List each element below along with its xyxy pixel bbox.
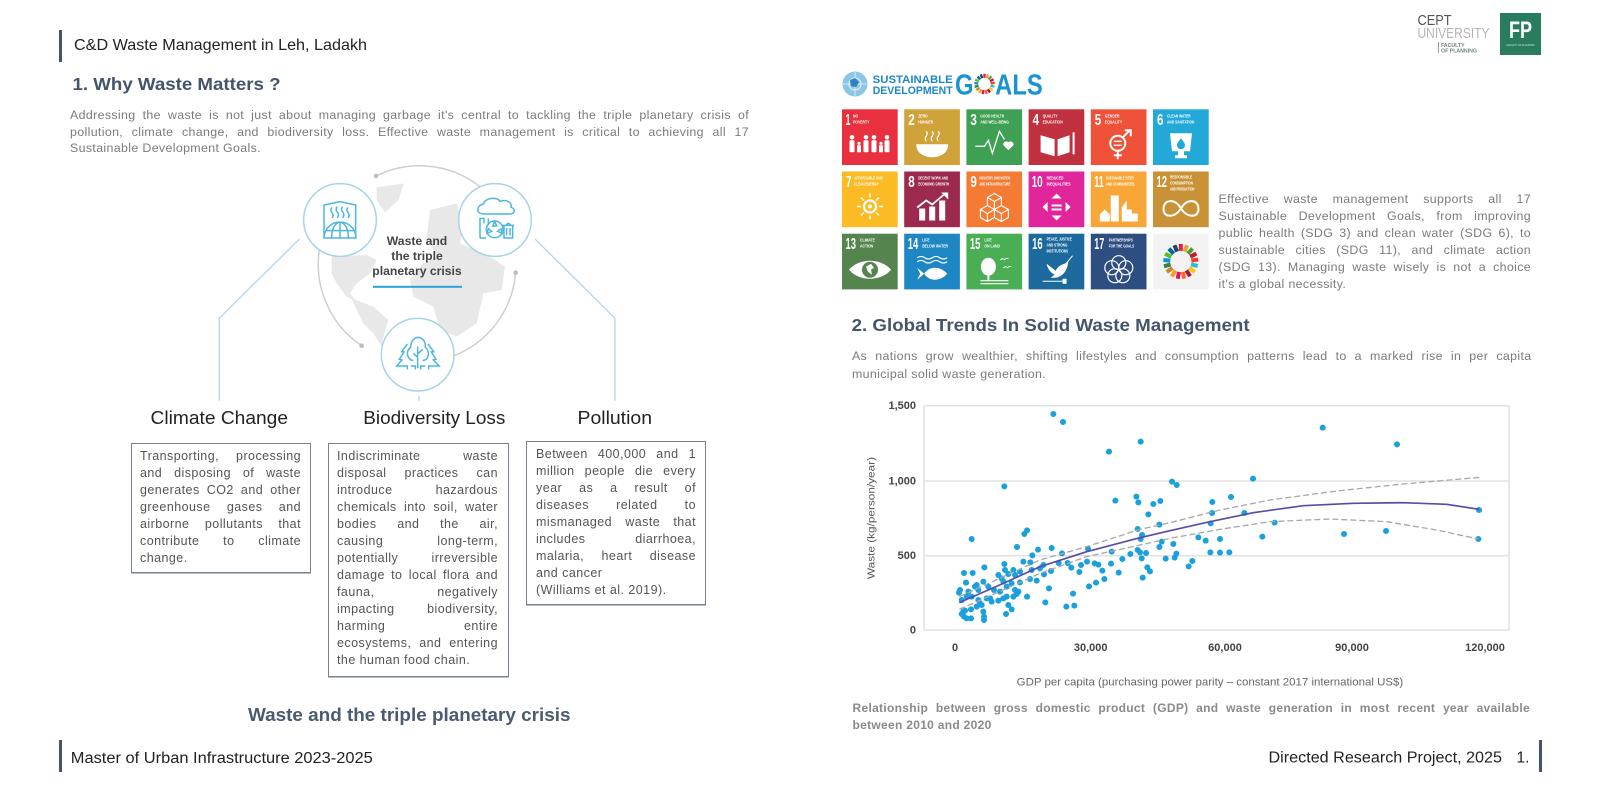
tile: SDG 7: 7 <box>846 174 852 191</box>
SDG tiles grid <box>842 109 1209 289</box>
tile: SDG 5 <box>1091 109 1146 165</box>
tile: SDG 2: 2 <box>908 112 915 129</box>
intro paragraph: why waste matters: Sustainable Development Goals. <box>70 141 261 155</box>
text box: climate change: Transporting, processing <box>140 449 301 463</box>
y axis tick labels: 500 <box>898 550 916 562</box>
diagram: waste and the triple planetary crisis <box>219 166 615 401</box>
tile: SDG 1: 1 <box>846 112 851 129</box>
text box: pollution: million people die every <box>536 464 696 478</box>
text box: biodiversity loss: bodies and the air, <box>337 517 498 531</box>
cycle arrow heads <box>359 174 518 348</box>
icon: greenhouse effect <box>304 184 376 256</box>
tile: SDG 12: RESPONSIBLE <box>1170 175 1193 180</box>
grey cycle arrows <box>318 166 516 356</box>
label: climate change: Climate Change <box>150 408 288 428</box>
tile: SDG 1: NO <box>853 113 858 118</box>
tile: SDG 4 <box>1029 109 1084 165</box>
tile: SDG 8 <box>904 172 960 227</box>
trend line <box>959 503 1479 603</box>
tile: SDG 11 <box>1091 172 1146 227</box>
x axis tick labels: 120,000 <box>1465 642 1505 654</box>
tile: SDG 8: DECENT WORK AND <box>918 176 948 181</box>
tile: SDG 17: PARTNERSHIPS <box>1109 238 1133 243</box>
tile: SDG 17 <box>1091 234 1146 289</box>
tile: SDG 11: SUSTAINABLE CITIES <box>1106 176 1134 181</box>
diagram centre title: Waste and <box>387 234 447 248</box>
tile: SDG 7: AFFORDABLE AND <box>854 176 883 181</box>
SDG description paragraph: sustainable cities (SDG 11), and climate action <box>1218 242 1531 256</box>
tile: SDG 16 <box>1029 234 1084 289</box>
SDG description paragraph: Sustainable Development Goals, from improving <box>1218 208 1531 222</box>
CEPT University logo: FACULTY <box>1441 43 1465 49</box>
global trends paragraph: municipal solid waste generation. <box>852 366 1046 380</box>
x axis title: GDP per capita (purchasing power parity – constant 2017 international US$) <box>1017 676 1403 688</box>
tile: SDG 2: HUNGER <box>918 119 933 124</box>
tile: SDG 16: INSTITUTIONS <box>1047 249 1068 254</box>
icon: UN emblem <box>842 72 868 96</box>
connector lines <box>219 239 615 401</box>
tile: SDG 9 <box>966 172 1022 227</box>
CEPT University logo: CEPT <box>1418 12 1452 29</box>
global trends paragraph: As nations grow wealthier, shifting lifestyles and consumption patterns lead to a marked rise in per capita <box>852 349 1532 363</box>
heading: why waste matters: 1. Why Waste Matters ? <box>72 74 280 94</box>
tile: SDG 13: CLIMATE <box>860 237 875 243</box>
intro paragraph: why waste matters: pollution, climate change, and biodiversity loss. Effective waste management is critical to achieving all 17 <box>70 125 749 139</box>
icon: biodiversity trees <box>381 318 454 391</box>
tile: SDG 2 <box>904 109 960 165</box>
globe land masses <box>332 183 505 347</box>
text box: pollution: Between 400,000 and 1 <box>536 447 696 461</box>
tile: SDG 9: 9 <box>970 174 977 191</box>
tile: SDG 14 <box>904 234 960 289</box>
text box: biodiversity loss: fauna, negatively <box>337 585 498 599</box>
tile: SDG 2: ZERO <box>918 113 928 118</box>
global trends paragraph <box>852 349 1532 380</box>
tile: SDG 3 <box>966 109 1022 165</box>
label: pollution: Pollution <box>578 408 652 428</box>
tile: SDG 14: 14 <box>908 236 918 253</box>
text box: pollution <box>526 441 706 605</box>
tile: SDG 13: 13 <box>846 236 856 253</box>
diagram title underline <box>373 286 462 288</box>
x axis tick labels: 30,000 <box>1074 642 1108 654</box>
diagram centre title: planetary crisis <box>372 264 462 278</box>
tile: SDG 9: INDUSTRY, INNOVATION <box>979 176 1011 181</box>
Faculty of Planning logo: FACULTY OF PLANNING <box>1506 43 1535 47</box>
tile: SDG 1 <box>842 109 898 165</box>
tile: SDG 17: 17 <box>1094 236 1104 253</box>
tile: SDG 10 <box>1029 172 1084 227</box>
y axis tick labels <box>888 400 916 636</box>
tile: SDG 15: 15 <box>970 236 980 253</box>
tile: SDG 7 <box>842 172 898 227</box>
SDG description paragraph: (SDG 13). Managing waste wisely is not a choice <box>1218 260 1531 274</box>
text box: pollution: malaria, heart disease <box>536 549 696 563</box>
tile: SDG 12: 12 <box>1156 174 1167 191</box>
y axis tick labels: 1,000 <box>888 476 916 488</box>
tile: SDG 12: CONSUMPTION <box>1170 181 1193 186</box>
tile: SDG 12 <box>1153 172 1209 227</box>
data points <box>959 414 1479 620</box>
footer project text: Directed Research Project, 2025 <box>1268 750 1502 766</box>
tile: SDG 6: AND SANITATION <box>1167 120 1195 124</box>
tile: SDG 3: GOOD HEALTH <box>980 114 1004 118</box>
y axis title: Waste (kg/person/year) <box>866 457 878 579</box>
diagram caption: Waste and the triple planetary crisis <box>248 705 570 725</box>
y axis tick labels: 0 <box>910 624 916 636</box>
text box: biodiversity loss: Indiscriminate waste <box>337 449 498 463</box>
tile: SDG 16: PEACE, JUSTICE <box>1047 237 1072 242</box>
SDG description paragraph: public health (SDG 3) and clean water (SDG 6), to <box>1218 226 1531 240</box>
icon: pollution <box>459 184 531 256</box>
SDG description paragraph: Effective waste management supports all 17 <box>1218 192 1531 206</box>
SDG logo <box>842 68 1043 101</box>
x axis tick labels: 0 <box>952 642 958 654</box>
x axis tick labels <box>952 642 1505 654</box>
page number: 1. <box>1516 750 1529 766</box>
text box: biodiversity loss: chemicals into soil, water <box>337 500 498 514</box>
text box: biodiversity loss: potentially irreversible <box>337 551 498 565</box>
text box: biodiversity loss <box>328 443 508 677</box>
footer accent bar right <box>1539 740 1542 772</box>
confidence band lower <box>959 519 1478 609</box>
tile: SDG 14: BELOW WATER <box>922 243 948 249</box>
diagram centre title: the triple <box>391 249 443 263</box>
Faculty of Planning logo: FP <box>1509 17 1532 44</box>
chart caption: Relationship between gross domestic product (GDP) and waste generation in most recent year available <box>852 700 1530 714</box>
Faculty of Planning logo <box>1500 13 1541 55</box>
SDG description paragraph: it's a global necessity. <box>1218 276 1346 290</box>
footer programme text: Master of Urban Infrastructure 2023-2025 <box>71 750 373 767</box>
SDG logo: G <box>955 68 973 101</box>
diagram centre title <box>372 234 462 278</box>
tile: SDG 7: CLEAN ENERGY <box>854 182 879 187</box>
text box: biodiversity loss: causing long-term, <box>337 534 498 548</box>
chart caption: between 2010 and 2020 <box>852 718 992 732</box>
intro paragraph: why waste matters <box>70 108 749 155</box>
tile: SDG 6: 6 <box>1157 112 1164 129</box>
tile: SDG 8: ECONOMIC GROWTH <box>918 182 949 187</box>
tile: SDG 13 <box>842 234 898 289</box>
text box: biodiversity loss: the human food chain. <box>337 653 470 667</box>
SDG logo: ALS <box>995 68 1043 101</box>
x axis tick labels: 60,000 <box>1208 642 1242 654</box>
tile: SDG 16: 16 <box>1032 236 1043 253</box>
text box: biodiversity loss: ecosystems, and entering <box>337 636 498 650</box>
text box: biodiversity loss: impacting biodiversity, <box>337 602 498 616</box>
tile: SDG 6 <box>1153 109 1209 165</box>
x axis tick labels: 90,000 <box>1335 642 1369 654</box>
label: biodiversity loss: Biodiversity Loss <box>363 408 505 428</box>
text box: climate change: greenhouse gases and <box>140 500 301 514</box>
tile: SDG 4: EDUCATION <box>1043 119 1063 124</box>
tile: SDG 5: 5 <box>1095 112 1101 129</box>
tile: SDG 17: FOR THE GOALS <box>1109 244 1135 249</box>
text box: climate change: and disposing of waste <box>140 466 301 480</box>
text box: climate change: airborne pollutants that <box>140 517 301 531</box>
SDG logo: SUSTAINABLE <box>873 74 953 86</box>
confidence band upper <box>959 477 1480 597</box>
text box: pollution: mismanaged waste that <box>536 515 696 529</box>
tile: SDG 13: ACTION <box>860 243 873 249</box>
text box: pollution: and cancer <box>536 566 602 580</box>
tile: SDG 10: 10 <box>1032 174 1043 191</box>
intro paragraph: why waste matters: Addressing the waste is not just about managing garbage it's central to tackling the triple planetary crisis of <box>70 108 749 122</box>
text box: biodiversity loss: harming entire <box>337 619 498 633</box>
tile: SDG 8: 8 <box>908 174 915 191</box>
CEPT University logo: OF PLANNING <box>1441 48 1477 54</box>
tile: SDG 5: GENDER <box>1105 113 1120 118</box>
text box: climate change: contribute to climate <box>140 534 301 548</box>
tile: SDG 4: QUALITY <box>1043 113 1058 118</box>
tile: SDG 1: POVERTY <box>853 119 870 124</box>
tile: SDG 12: AND PRODUCTION <box>1170 187 1195 192</box>
SDG logo: DEVELOPMENT <box>873 85 953 97</box>
text box: biodiversity loss: disposal practices can <box>337 466 498 480</box>
chart caption <box>852 700 1530 732</box>
CEPT University logo <box>1418 12 1490 54</box>
y axis tick labels: 1,500 <box>888 400 916 412</box>
heading: global trends: 2. Global Trends In Solid Waste Management <box>852 315 1250 335</box>
text box: biodiversity loss: introduce hazardous <box>337 483 498 497</box>
text box: pollution: year as a result of <box>536 481 696 495</box>
tile: SDG 10: INEQUALITIES <box>1047 181 1071 187</box>
tile: SDG 5: EQUALITY <box>1105 119 1122 124</box>
text box: pollution: includes diarrhoea, <box>536 532 696 546</box>
SDG description paragraph <box>1218 192 1531 290</box>
footer accent bar left <box>59 740 62 772</box>
tile: SDG 4: 4 <box>1033 112 1039 129</box>
header accent bar <box>59 30 62 62</box>
text box: climate change: change. <box>140 551 188 565</box>
tile: SDG 11: 11 <box>1094 174 1104 191</box>
tile: SDG 14: LIFE <box>922 237 930 243</box>
text box: climate change <box>130 443 310 573</box>
tile: SDG 6: CLEAN WATER <box>1167 114 1191 118</box>
tile: SDG 16: AND STRONG <box>1047 243 1067 248</box>
scatter chart: waste vs GDP <box>866 400 1509 688</box>
text box: pollution: diseases related to <box>536 498 696 512</box>
text box: climate change: generates CO2 and other <box>140 483 301 497</box>
CEPT University logo: UNIVERSITY <box>1418 25 1490 42</box>
tile: SDG 10: REDUCED <box>1047 175 1064 181</box>
text box: pollution: (Williams et al. 2019). <box>536 583 667 597</box>
tile: SDG 15: ON LAND <box>984 243 1000 249</box>
tile: SDG 11: AND COMMUNITIES <box>1106 182 1135 187</box>
tile: SDG 9: AND INFRASTRUCTURE <box>979 182 1011 187</box>
document title: C&D Waste Management in Leh, Ladakh <box>74 37 367 54</box>
text box: biodiversity loss: damage to local flora and <box>337 568 498 582</box>
tile: SDG 3: 3 <box>970 112 977 129</box>
tile: SDG wheel <box>1153 234 1209 289</box>
chart gridlines <box>924 406 1509 630</box>
tile: SDG 15 <box>966 234 1022 289</box>
tile: SDG 3: AND WELL-BEING <box>980 120 1009 124</box>
tile: SDG 15: LIFE <box>984 237 992 243</box>
